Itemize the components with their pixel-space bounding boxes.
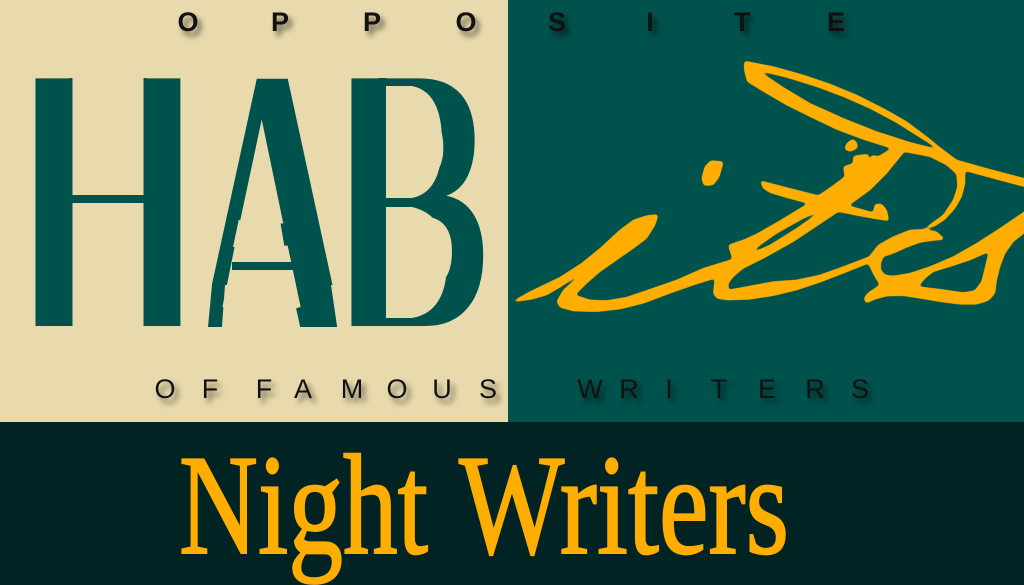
title: HAB: A xyxy=(195,0,349,407)
title: HAB: B xyxy=(337,1,493,403)
panel: cream background xyxy=(0,0,508,422)
icon: gold signature forming the rest of the word xyxy=(511,61,1024,312)
top line: OPPOSITE: OPPOSITE xyxy=(177,7,845,37)
heading: Night Writers: Night xyxy=(179,426,428,584)
heading: Night Writers xyxy=(179,426,789,584)
panel: dark footer band xyxy=(0,422,1024,585)
title: HAB xyxy=(19,0,493,407)
panel: teal background xyxy=(508,0,1024,422)
title: HAB: H xyxy=(19,1,197,403)
heading: Night Writers: Writers xyxy=(459,426,789,584)
subtitle line: OF FAMOUS WRITERS: OF FAMOUS WRITERS xyxy=(154,374,869,404)
